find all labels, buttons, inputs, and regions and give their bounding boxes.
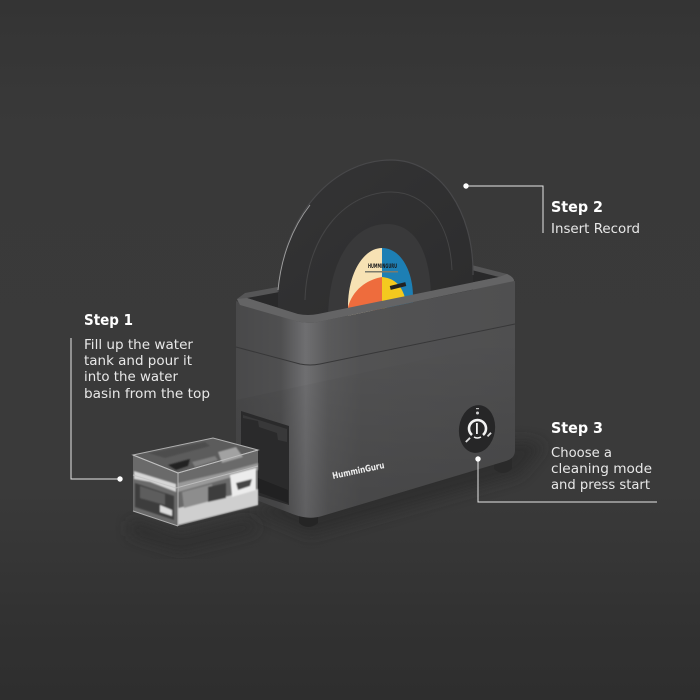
step 1 text [84, 311, 210, 402]
step 2 text [551, 198, 640, 237]
water tank slot [241, 411, 289, 505]
body bottom shading [236, 340, 515, 518]
step 3 text [551, 419, 652, 493]
step 1 text: Fill up the water [84, 338, 194, 353]
step 3 text: Step 3 [551, 419, 603, 437]
step 2 leader line [463, 183, 543, 233]
record label [348, 248, 413, 316]
tank body [133, 438, 258, 526]
step 3 text: cleaning mode [551, 462, 652, 477]
record player device [236, 160, 515, 527]
step 3 text: Choose a [551, 446, 612, 461]
basin interior [247, 262, 499, 315]
step 2 text: Step 2 [551, 198, 603, 216]
step 3 text: and press start [551, 478, 650, 493]
floor shadow [250, 440, 545, 535]
seam line [236, 324, 515, 365]
tank top [133, 438, 258, 473]
step 1 text: basin from the top [84, 387, 210, 402]
label title: HUMMINGURU [368, 263, 397, 270]
device feet [299, 458, 512, 527]
control dial [456, 403, 498, 455]
step 1 text: Step 1 [84, 311, 133, 329]
step 1 leader line [71, 338, 123, 482]
body shell [236, 281, 515, 518]
brand name: HumminGuru [332, 461, 385, 482]
step 2 text: Insert Record [551, 222, 640, 237]
step 3 leader line [475, 456, 657, 502]
infographic canvas [70, 159, 657, 527]
basin outer rim [237, 257, 514, 323]
tank shadow [130, 520, 260, 550]
front rim [237, 274, 514, 323]
vinyl record [278, 160, 473, 330]
step 1 text: tank and pour it [84, 354, 192, 369]
water tank [130, 438, 260, 550]
tank edges [133, 450, 258, 526]
step 1 text: into the water [84, 370, 179, 385]
tank highlights [134, 442, 258, 525]
